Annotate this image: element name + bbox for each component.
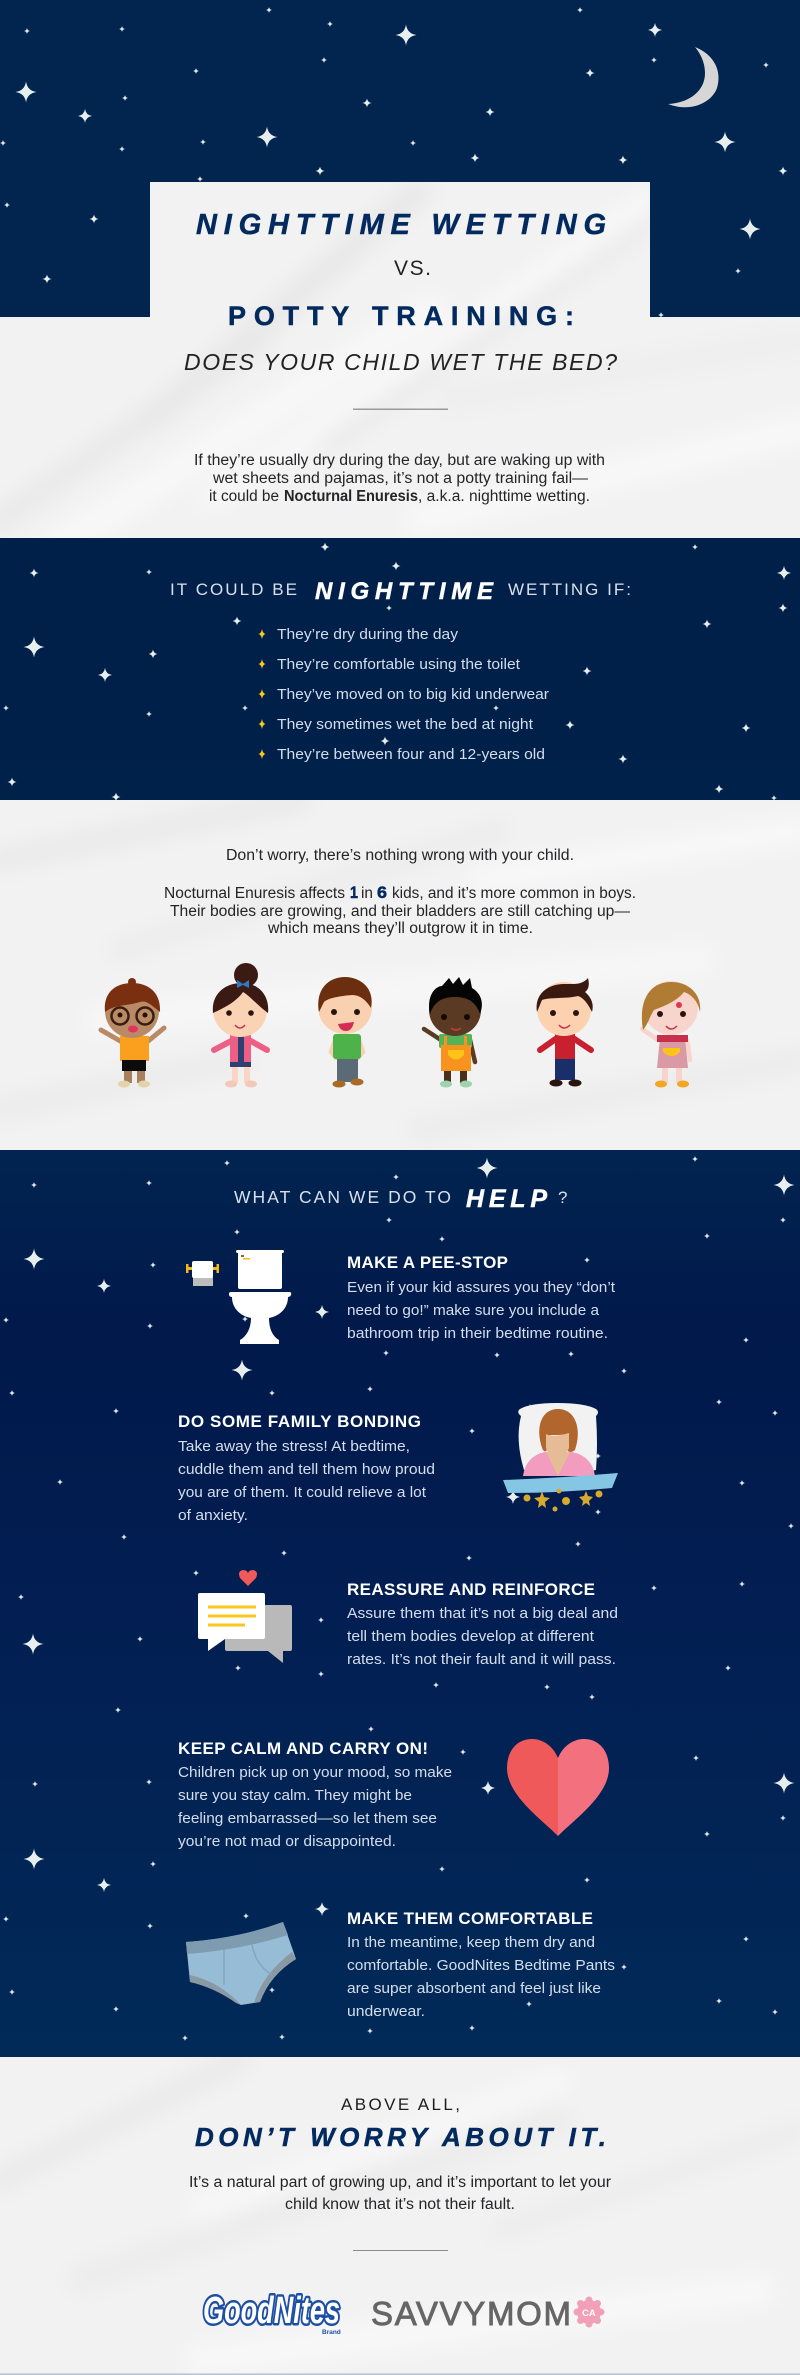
- text block: nocturnal enuresis stats: which means they’ll outgrow it in time.: [267, 920, 533, 937]
- tip: make them comfortable: are super absorbent and feel just like: [347, 1980, 601, 1997]
- list: signs of nighttime wetting: They’re comfortable using the toilet: [277, 656, 521, 673]
- tip: do some family bonding: you are of them. It could relieve a lot: [178, 1484, 427, 1501]
- text block: intro paragraph: it could be: [209, 488, 279, 505]
- text block: nocturnal enuresis stats: in: [361, 885, 373, 902]
- text block: intro paragraph: Nocturnal Enuresis: [284, 488, 418, 505]
- text block: intro paragraph: [194, 452, 605, 505]
- tip: reassure and reinforce: tell them bodies develop at different: [347, 1628, 595, 1645]
- logo: savvymom: CA: [582, 2308, 596, 2319]
- stars: header sky: [0, 7, 788, 318]
- heading: it could be nighttime wetting if: IT COULD BE: [170, 580, 297, 599]
- icon: crescent moon: [668, 47, 719, 107]
- icon: speech bubbles with heart: [198, 1570, 292, 1663]
- tip: keep calm and carry on: you’re not mad or disappointed.: [178, 1833, 396, 1850]
- tip: make a pee-stop: bathroom trip in their bedtime routine.: [347, 1325, 608, 1342]
- text block: closing paragraph: It’s a natural part of growing up, and it’s important to let your: [189, 2174, 611, 2191]
- panel: don't worry sheet: [98, 800, 774, 1088]
- child 1: girl with glasses: [101, 978, 164, 1088]
- logo: savvymom: SAVVYMOM: [371, 2295, 571, 2332]
- child 4: boy in orange overalls: [424, 977, 482, 1088]
- title: potty training: POTTY TRAINING:: [228, 301, 574, 331]
- tip: keep calm and carry on: Children pick up on your mood, so make: [178, 1764, 452, 1781]
- panel: night sky header: [0, 0, 800, 538]
- text block: nocturnal enuresis stats: 6: [377, 883, 387, 902]
- tip: reassure and reinforce: Assure them that it’s not a big deal and: [347, 1605, 618, 1622]
- tip: make them comfortable: MAKE THEM COMFORTABLE: [347, 1909, 593, 1928]
- text block: nocturnal enuresis stats: 1: [350, 883, 358, 902]
- tip: do some family bonding: DO SOME FAMILY BONDING: [178, 1412, 421, 1431]
- icon: folded paper heart: [507, 1739, 609, 1836]
- illustration: six children: [101, 963, 700, 1088]
- subtitle: does your child wet the bed: DOES YOUR CHILD WET THE BED?: [184, 349, 617, 375]
- text block: nocturnal enuresis stats: [164, 883, 636, 937]
- logo: goodnites: Brand: [322, 2329, 341, 2336]
- text block: nocturnal enuresis stats: kids, and it’s more common in boys.: [392, 885, 636, 902]
- tip: do some family bonding: of anxiety.: [178, 1507, 248, 1524]
- heading: what can we do to help: ?: [558, 1188, 567, 1207]
- text block: closing paragraph: [189, 2174, 611, 2213]
- panel: intro sheet: [0, 182, 800, 545]
- heading: what can we do to help: WHAT CAN WE DO TO: [234, 1187, 451, 1207]
- panel: it could be nighttime wetting if: [0, 538, 800, 802]
- text block: intro paragraph: wet sheets and pajamas, it’s not a potty training fail—: [212, 470, 589, 487]
- logo: goodnites: GoodNites: [203, 2290, 340, 2332]
- child 2: girl with bun: [213, 963, 268, 1088]
- text block: nocturnal enuresis stats: Their bodies are growing, and their bladders are still catching up—: [170, 903, 630, 920]
- tip: make them comfortable: underwear.: [347, 2003, 425, 2020]
- tip: keep calm and carry on: sure you stay calm. They might be: [178, 1787, 412, 1804]
- tip: reassure and reinforce: [347, 1580, 618, 1668]
- child 3: boy in green shirt: [318, 977, 372, 1088]
- heading: it could be nighttime wetting if: WETTING IF:: [508, 580, 631, 599]
- tip: make them comfortable: [347, 1909, 615, 2020]
- icon: sleeping parent under blanket: [503, 1403, 618, 1512]
- text block: nocturnal enuresis stats: Nocturnal Enuresis affects: [164, 885, 345, 902]
- tip: keep calm and carry on: KEEP CALM AND CARRY ON!: [178, 1739, 428, 1758]
- stars: checklist section: [3, 542, 791, 802]
- list: signs of nighttime wetting: They’re dry during the day: [277, 626, 459, 643]
- tip: do some family bonding: Take away the stress! At bedtime,: [178, 1438, 410, 1455]
- heading: what can we do to help: [234, 1185, 567, 1213]
- heading: it could be nighttime wetting if: [170, 578, 631, 605]
- tip: make a pee-stop: need to go!” make sure you include a: [347, 1302, 600, 1319]
- title: nighttime wetting: NIGHTTIME WETTING: [196, 209, 606, 241]
- tip: make a pee-stop: [347, 1253, 616, 1342]
- tip: do some family bonding: [178, 1412, 435, 1524]
- tip: make a pee-stop: MAKE A PEE-STOP: [347, 1253, 508, 1272]
- icon: toilet and paper roll: [186, 1250, 291, 1344]
- child 6: girl in pink dress: [642, 981, 700, 1088]
- text block: intro paragraph: , a.k.a. nighttime wetting.: [418, 488, 590, 505]
- tip: make a pee-stop: Even if your kid assures you they “don’t: [347, 1279, 616, 1296]
- text: above all: ABOVE ALL,: [341, 2095, 460, 2114]
- text: don't worry line: Don’t worry, there’s nothing wrong with your child.: [226, 847, 574, 864]
- heading: what can we do to help: HELP: [466, 1185, 547, 1213]
- icon: underwear: [186, 1922, 296, 2005]
- tip: reassure and reinforce: rates. It’s not their fault and it will pass.: [347, 1651, 616, 1668]
- tip: keep calm and carry on: feeling embarrassed—so let them see: [178, 1810, 437, 1827]
- list: signs of nighttime wetting: They sometimes wet the bed at night: [277, 716, 534, 733]
- tip: keep calm and carry on: [178, 1739, 452, 1850]
- tip: do some family bonding: cuddle them and tell them how proud: [178, 1461, 435, 1478]
- panel: closing sheet: [0, 2098, 800, 2375]
- child 5: boy in red sweater: [537, 978, 593, 1086]
- tip: make them comfortable: comfortable. GoodNites Bedtime Pants: [347, 1957, 615, 1974]
- tip: reassure and reinforce: REASSURE AND REINFORCE: [347, 1580, 595, 1599]
- list: signs of nighttime wetting: [258, 626, 549, 763]
- heading: it could be nighttime wetting if: NIGHTTIME: [315, 578, 494, 605]
- heading: don't worry about it: DON’T WORRY ABOUT IT.: [195, 2122, 606, 2152]
- text block: closing paragraph: child know that it’s not their fault.: [285, 2196, 515, 2213]
- panel: what can we do to help: [0, 1150, 800, 2057]
- list: signs of nighttime wetting: They’re between four and 12-years old: [277, 746, 545, 763]
- text block: intro paragraph: If they’re usually dry during the day, but are waking up with: [194, 452, 605, 469]
- title: vs: VS.: [394, 257, 431, 280]
- list: signs of nighttime wetting: They’ve moved on to big kid underwear: [277, 686, 549, 703]
- tip: make them comfortable: In the meantime, keep them dry and: [347, 1934, 595, 1951]
- stars: help section: [3, 1156, 794, 2041]
- logo: goodnites: [203, 2290, 341, 2336]
